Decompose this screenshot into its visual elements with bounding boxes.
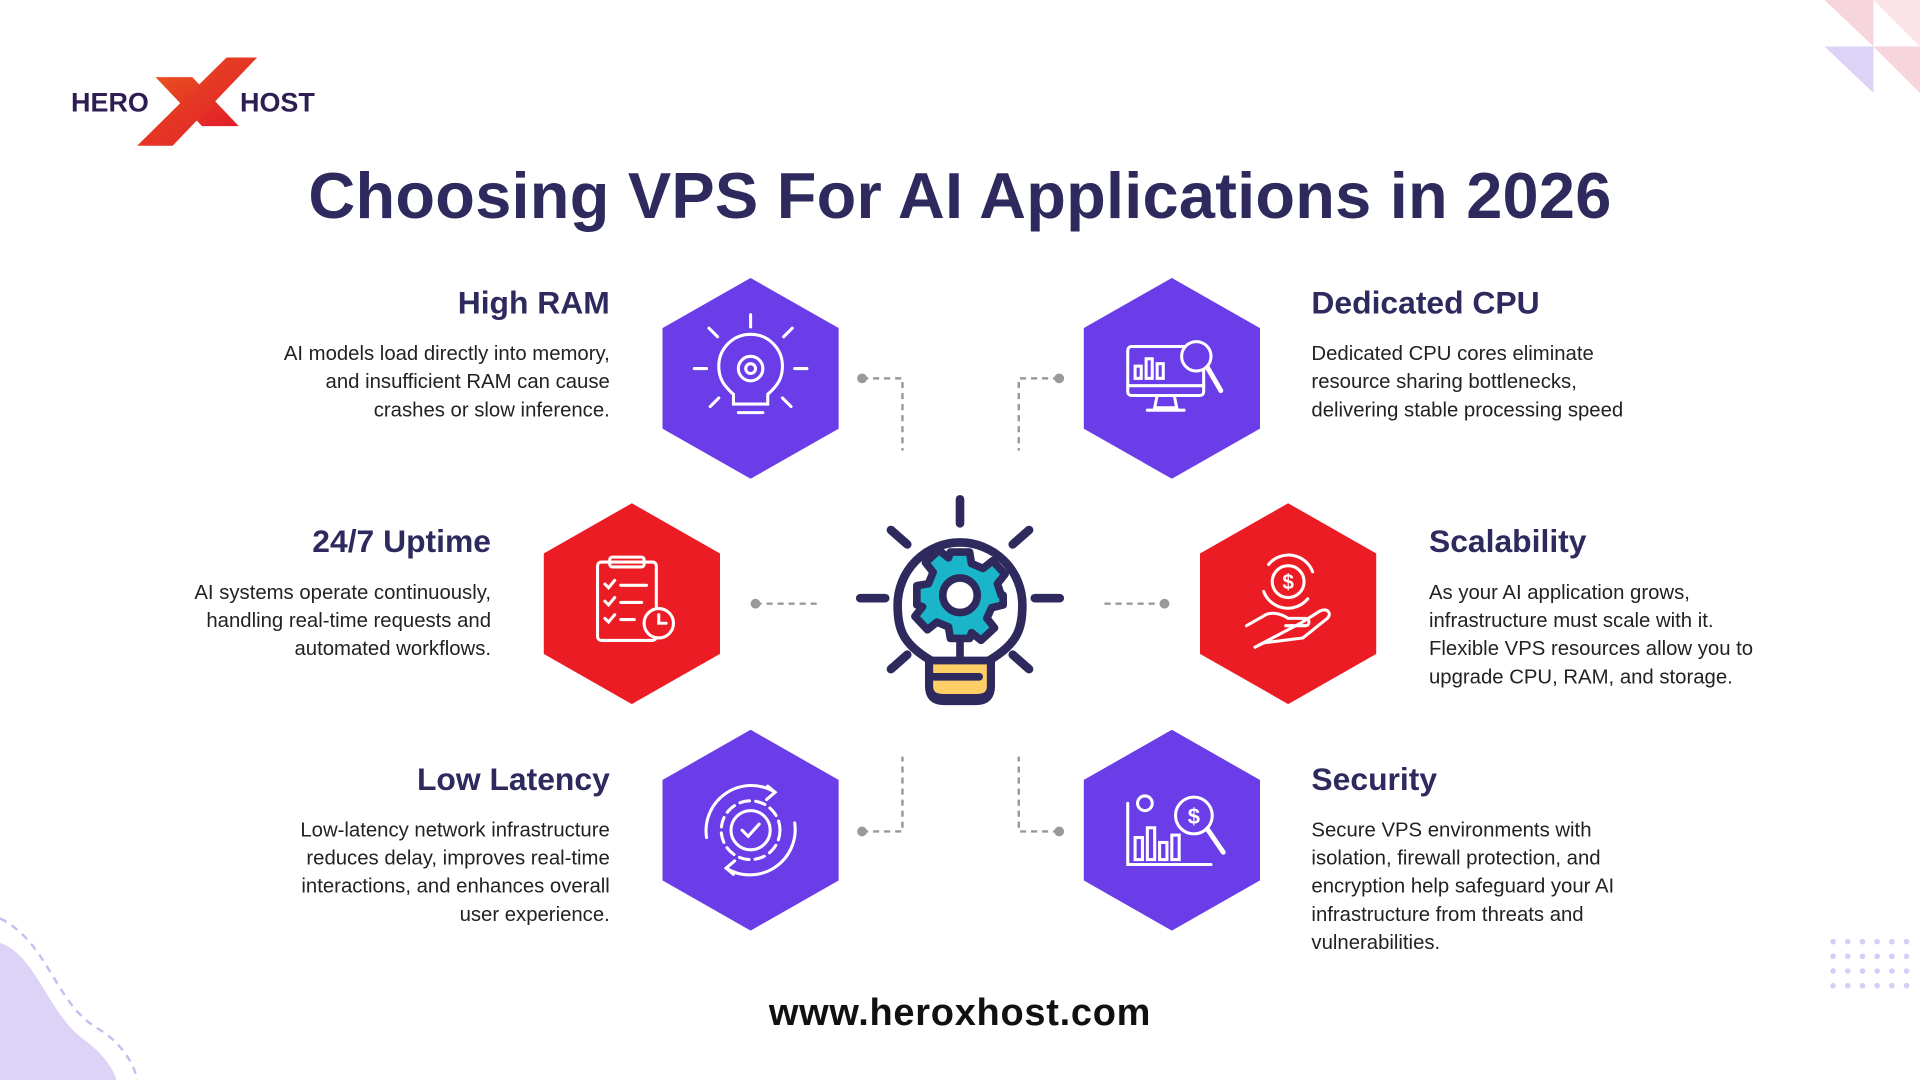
text: High RAM: crashes or slow inference. [374, 398, 610, 421]
logo: HOST [240, 87, 315, 118]
title: Choosing VPS For AI Applications in 2026 [308, 160, 1612, 233]
footer url: www.heroxhost.com [769, 991, 1151, 1033]
text: Scalability: As your AI application grows, [1429, 580, 1690, 604]
text: Dedicated CPU [1311, 284, 1623, 421]
text: High RAM: and insufficient RAM can cause [326, 370, 610, 393]
text: 24/7 Uptime: handling real-time requests and [206, 609, 491, 632]
hex: Security: $ [1188, 804, 1200, 829]
text: Scalability [1429, 523, 1753, 688]
text: Dedicated CPU: resource sharing bottlenecks, [1311, 370, 1577, 393]
text: 24/7 Uptime [194, 523, 491, 660]
text: Low Latency: reduces delay, improves real-time [306, 846, 610, 869]
text: Low Latency: interactions, and enhances overall [301, 874, 610, 898]
text: Security: infrastructure from threats and [1311, 902, 1584, 926]
text: High RAM: High RAM [458, 284, 610, 321]
logo [71, 58, 315, 146]
text: Scalability: Flexible VPS resources allow you to [1429, 637, 1753, 660]
decoration: dot grid [1830, 938, 1910, 988]
hex: Low Latency [662, 730, 839, 930]
text: Security: Secure VPS environments with [1311, 818, 1592, 841]
hex: Scalability: $ [1282, 571, 1294, 594]
text: Security: encryption help safeguard your AI [1311, 874, 1614, 898]
text: Low Latency: Low-latency network infrastructure [300, 818, 610, 841]
text: 24/7 Uptime: AI systems operate continuously, [194, 580, 491, 604]
decoration: top right triangles [1824, 0, 1920, 93]
hex: 24/7 Uptime [544, 503, 720, 704]
text: Dedicated CPU: delivering stable processing speed [1311, 398, 1623, 421]
icon: central bulb [856, 495, 1064, 706]
text: Scalability: infrastructure must scale with it. [1429, 609, 1714, 632]
text: High RAM [284, 284, 610, 421]
text: Scalability: Scalability [1429, 523, 1586, 560]
hex: Scalability [1200, 503, 1376, 704]
text: 24/7 Uptime: 24/7 Uptime [312, 523, 491, 560]
text: Security: Security [1311, 760, 1437, 797]
text: Low Latency [300, 760, 610, 926]
text: 24/7 Uptime: automated workflows. [295, 637, 491, 660]
text: Dedicated CPU: Dedicated CPU [1311, 284, 1540, 321]
text: Security: vulnerabilities. [1311, 931, 1440, 954]
decoration: bottom left blob [0, 917, 138, 1080]
logo: HERO [71, 87, 149, 118]
text: Low Latency: user experience. [460, 902, 610, 926]
text: Security [1311, 760, 1614, 954]
text: Low Latency: Low Latency [417, 760, 610, 797]
text: Dedicated CPU: Dedicated CPU cores eliminate [1311, 342, 1594, 365]
hex: High RAM [662, 278, 839, 479]
text: Scalability: upgrade CPU, RAM, and storage. [1429, 665, 1733, 688]
text: Security: isolation, firewall protection, and [1311, 846, 1601, 869]
text: High RAM: AI models load directly into memory, [284, 342, 610, 365]
hex: Dedicated CPU [1084, 278, 1260, 479]
hex: Security [1084, 730, 1260, 930]
